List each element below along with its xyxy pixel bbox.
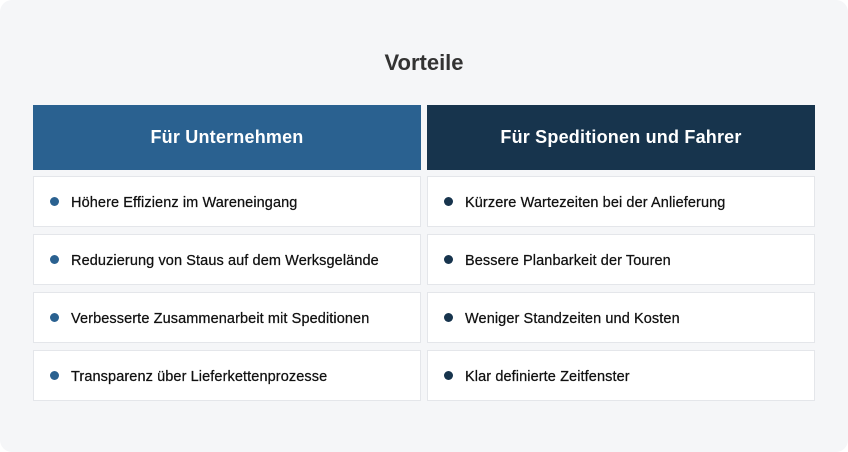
heading: Für Speditionen und Fahrer <box>427 105 815 170</box>
item 4: Klar definierte Zeitfenster <box>465 369 630 385</box>
heading: Für Unternehmen: Für Unternehmen <box>150 127 304 147</box>
panel: Für Unternehmen <box>33 105 421 401</box>
item 1: Höhere Effizienz im Wareneingang <box>71 195 297 211</box>
item 4 <box>427 350 815 401</box>
item 4 <box>33 350 421 401</box>
item 3 <box>427 292 815 343</box>
heading: Für Unternehmen <box>33 105 421 170</box>
item 1 <box>33 176 421 227</box>
item 2 <box>33 234 421 285</box>
item 2 <box>427 234 815 285</box>
heading: Für Speditionen und Fahrer: Für Speditionen und Fahrer <box>500 127 742 147</box>
item 3: Weniger Standzeiten und Kosten <box>465 311 680 327</box>
item 3: Verbesserte Zusammenarbeit mit Speditionen <box>71 311 369 327</box>
item 1 <box>427 176 815 227</box>
item 2: Reduzierung von Staus auf dem Werksgelände <box>71 253 379 269</box>
title: Vorteile <box>384 50 464 75</box>
item 3 <box>33 292 421 343</box>
item 4: Transparenz über Lieferkettenprozesse <box>71 369 327 385</box>
item 2: Bessere Planbarkeit der Touren <box>465 253 671 269</box>
item 1: Kürzere Wartezeiten bei der Anlieferung <box>465 195 725 211</box>
panel: Für Speditionen und Fahrer <box>427 105 815 401</box>
